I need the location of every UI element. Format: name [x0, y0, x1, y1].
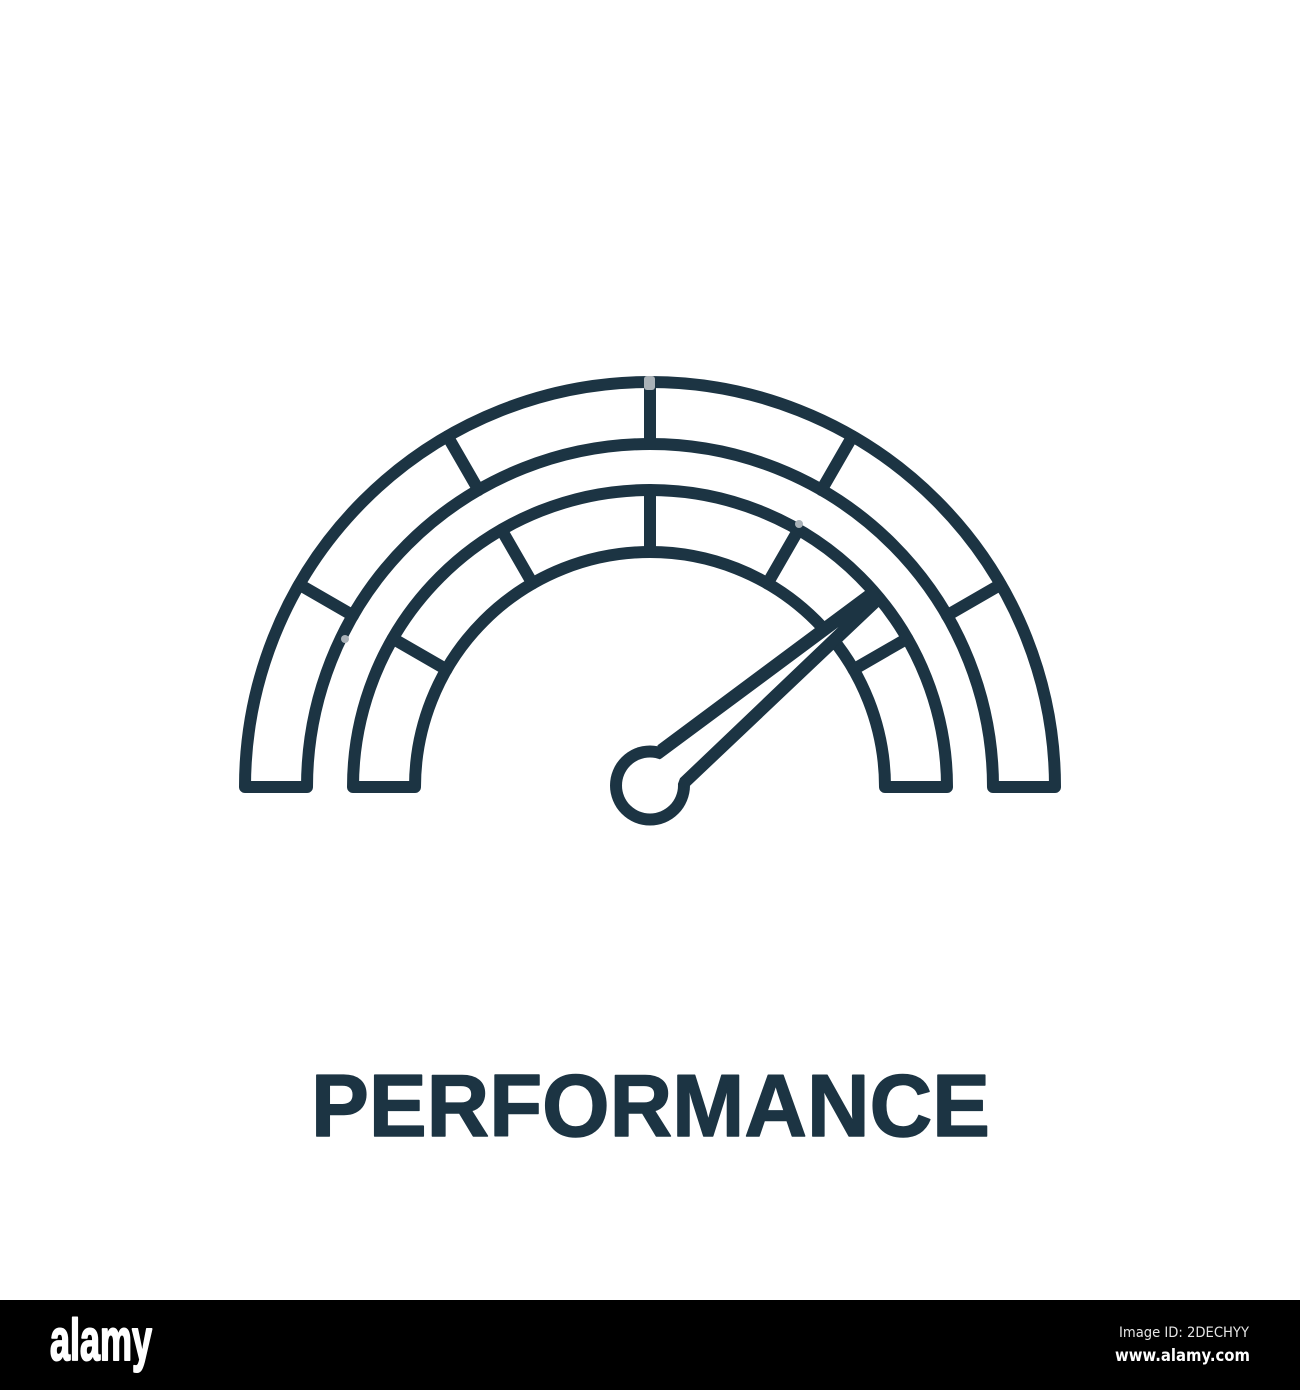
footer image id: Image ID: 2DECHYY [1119, 1325, 1249, 1341]
footer website: www.alamy.com [1115, 1346, 1250, 1366]
outer gauge band [245, 382, 1055, 787]
gauge needle [610, 588, 880, 826]
inner gauge band [353, 490, 947, 787]
watermark specks [341, 376, 803, 643]
footer logo: alamy: alamy [50, 1308, 152, 1373]
footer bar [0, 1300, 1300, 1390]
icon: performance speedometer gauge [245, 376, 1055, 826]
icon label: PERFORMANCE: PERFORMANCE [311, 1056, 990, 1155]
